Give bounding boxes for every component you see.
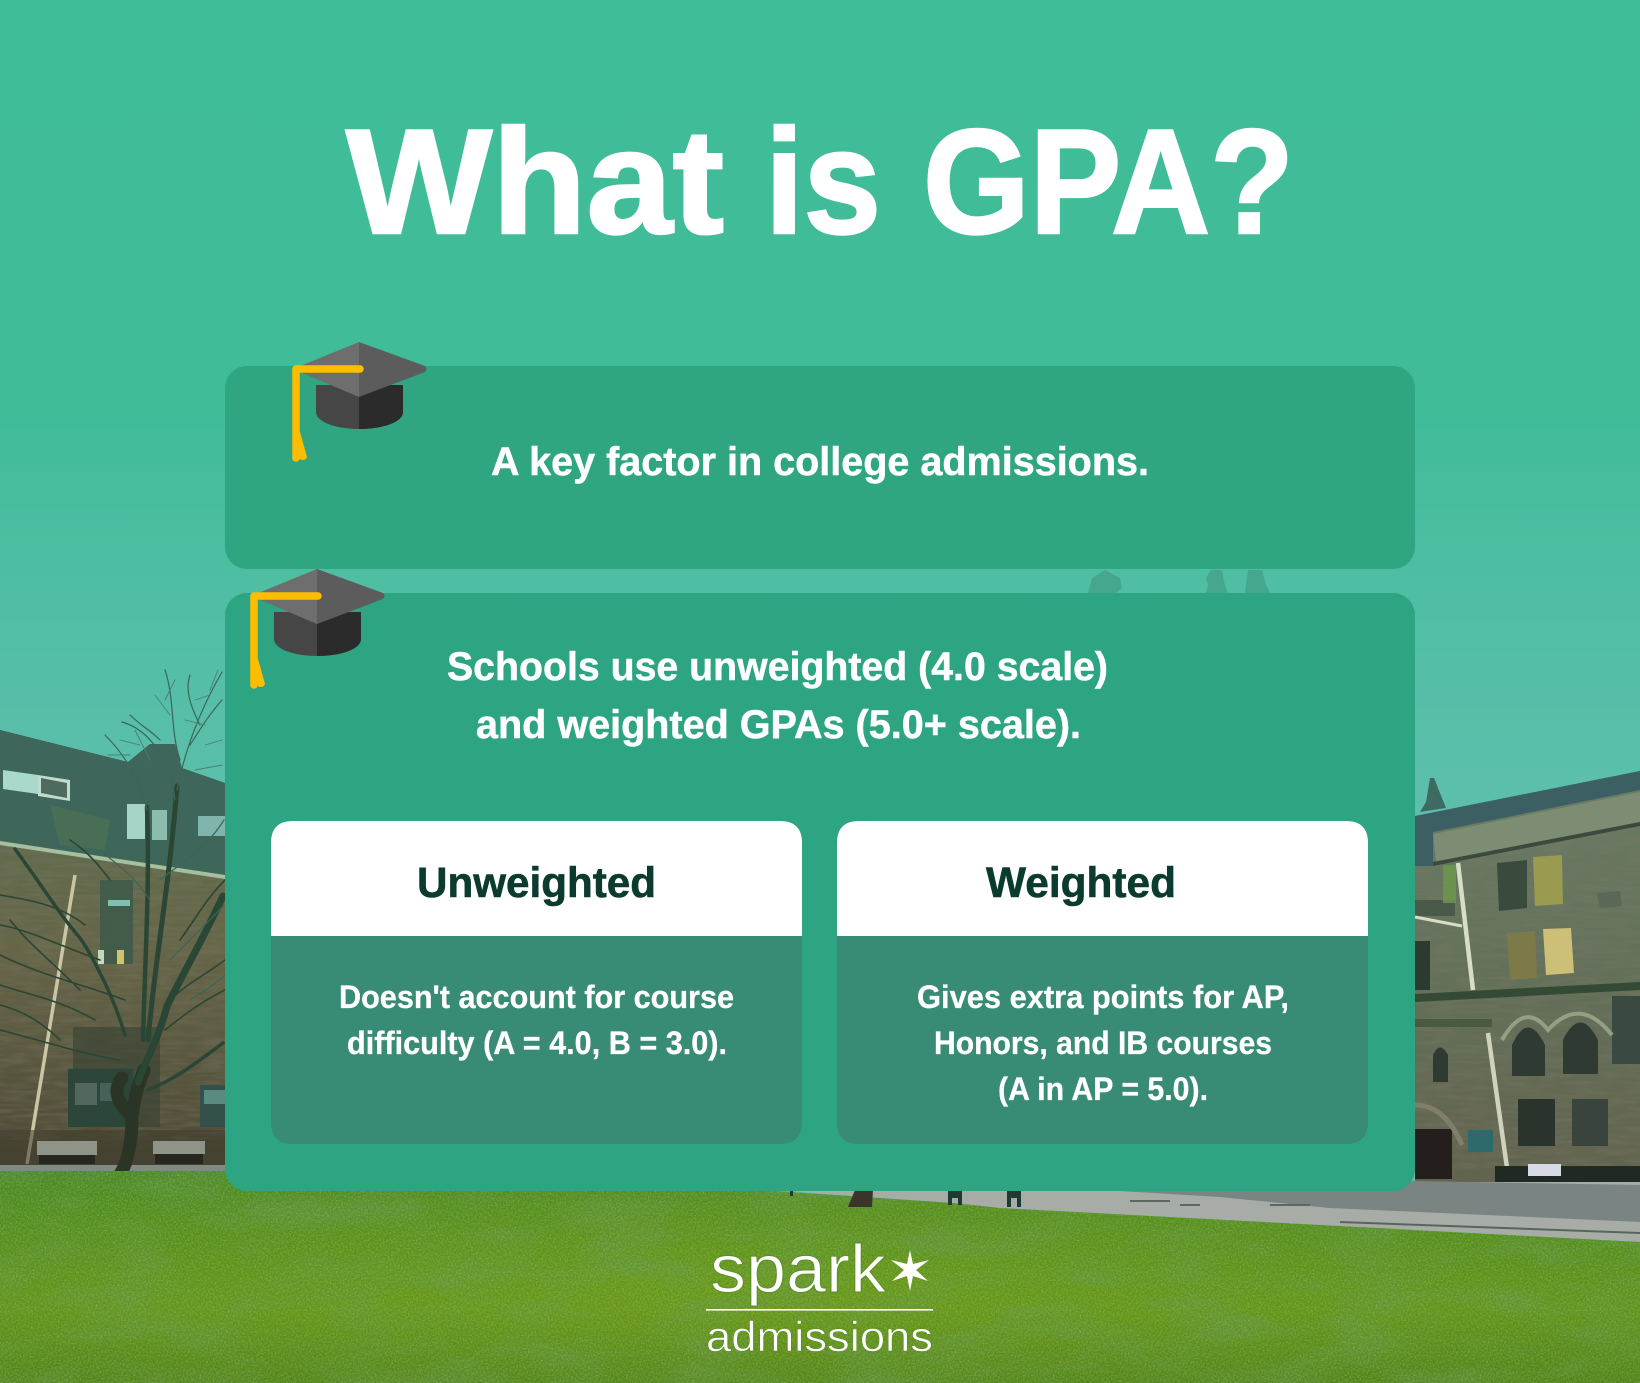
card body bbox=[339, 979, 734, 1061]
logo: spark admissions: spark bbox=[710, 1231, 887, 1307]
card body: difficulty (A = 4.0, B = 3.0). bbox=[347, 1025, 727, 1061]
left tree bbox=[0, 670, 225, 1177]
background photo: campus bbox=[0, 493, 1640, 1383]
logo: spark admissions bbox=[706, 1231, 933, 1360]
silhouettes above and below panels bbox=[1088, 570, 1270, 593]
title bbox=[346, 98, 1294, 265]
text: schools use: Schools use unweighted (4.0 scale) bbox=[447, 645, 1108, 689]
logo: spark admissions: admissions bbox=[706, 1313, 933, 1360]
panel: GPA types bbox=[225, 569, 1415, 1191]
card body bbox=[917, 979, 1289, 1107]
right building bbox=[1415, 771, 1640, 1183]
icon: graduation cap bbox=[251, 569, 384, 687]
card heading: Unweighted bbox=[417, 859, 656, 907]
card heading: Weighted bbox=[986, 859, 1176, 907]
card: weighted bbox=[837, 821, 1368, 1144]
title: GPA? bbox=[923, 98, 1294, 265]
grass bbox=[0, 1171, 1640, 1383]
card body: Gives extra points for AP, bbox=[917, 979, 1289, 1015]
title: is bbox=[765, 98, 881, 265]
panel: key factor bbox=[225, 342, 1415, 569]
left building bbox=[0, 730, 225, 1171]
icon: graduation cap bbox=[293, 342, 426, 460]
text: schools use: and weighted GPAs (5.0+ scale). bbox=[476, 703, 1081, 747]
text: schools use bbox=[447, 645, 1108, 747]
card body: (A in AP = 5.0). bbox=[998, 1071, 1208, 1107]
title: What bbox=[346, 98, 724, 265]
card body: Doesn't account for course bbox=[339, 979, 734, 1015]
text: key factor: A key factor in college admissions. bbox=[491, 440, 1149, 484]
card: unweighted bbox=[271, 821, 802, 1144]
card body: Honors, and IB courses bbox=[934, 1025, 1272, 1061]
road bbox=[760, 1181, 1640, 1242]
